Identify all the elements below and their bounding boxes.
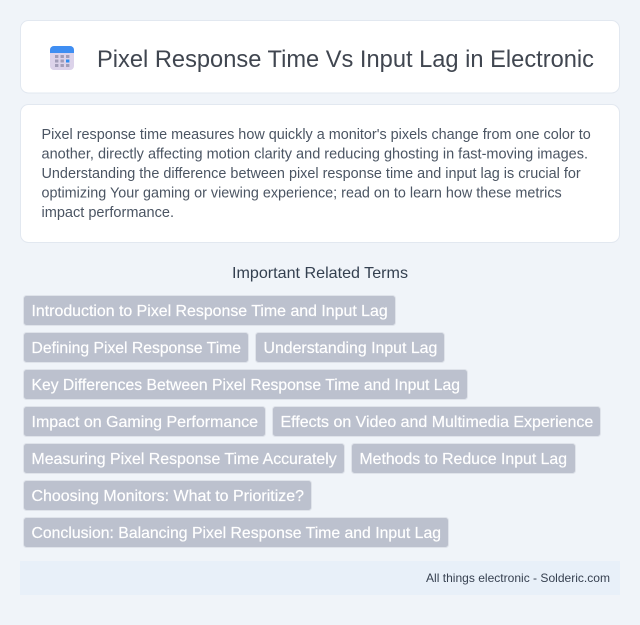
tag: impact on gaming: Impact on Gaming Performance	[32, 414, 258, 431]
heading: important related terms: Important Related Terms	[232, 265, 408, 282]
tag: choosing monitors: Choosing Monitors: What to Prioritize?	[32, 488, 304, 505]
tag: key differences: Key Differences Between Pixel Response Time and Input Lag	[32, 377, 460, 394]
footer: All things electronic - Solderic.com	[426, 571, 610, 585]
text block: introduction paragraph: another, directly affecting motion clarity and reducing ghosting in fast-moving images.	[42, 146, 588, 162]
title: Pixel Response Time Vs Input Lag in Electronic	[97, 46, 594, 73]
panel: related term tags	[24, 296, 600, 548]
tag: conclusion: Conclusion: Balancing Pixel Response Time and Input Lag	[32, 525, 441, 542]
text block: introduction paragraph: Pixel response time measures how quickly a monitor's pixels change from one color to	[42, 127, 591, 143]
tag: methods to reduce input lag	[352, 444, 576, 474]
tag: effects on video: Effects on Video and Multimedia Experience	[280, 414, 593, 431]
tag: impact on gaming	[24, 406, 266, 436]
text block: introduction paragraph: Understanding the difference between pixel response time and input lag is crucial for	[42, 166, 581, 182]
tag: defining pixel response time: Defining Pixel Response Time	[32, 340, 241, 357]
text block: introduction paragraph: optimizing Your gaming or viewing experience; read on to learn how these metrics	[42, 186, 562, 202]
panel: title card	[20, 20, 620, 93]
tag: key differences	[24, 370, 468, 400]
tag: introduction	[24, 296, 396, 326]
tag: measuring pixel response time: Measuring Pixel Response Time Accurately	[32, 451, 337, 468]
tag: choosing monitors	[24, 480, 312, 510]
footer	[20, 561, 620, 595]
text block: introduction paragraph: impact performance.	[42, 205, 174, 221]
tag: measuring pixel response time	[24, 444, 344, 474]
tag: effects on video	[272, 406, 600, 436]
tag: methods to reduce input lag: Methods to Reduce Input Lag	[360, 451, 567, 468]
icon: calendar	[50, 46, 74, 70]
text block: introduction paragraph	[42, 127, 591, 221]
tag: conclusion	[24, 518, 448, 548]
tag: understanding input lag	[256, 332, 444, 362]
panel: introduction	[20, 104, 620, 242]
tag: understanding input lag: Understanding Input Lag	[264, 340, 437, 357]
tag: introduction: Introduction to Pixel Response Time and Input Lag	[32, 303, 388, 320]
tag: defining pixel response time	[24, 332, 248, 362]
